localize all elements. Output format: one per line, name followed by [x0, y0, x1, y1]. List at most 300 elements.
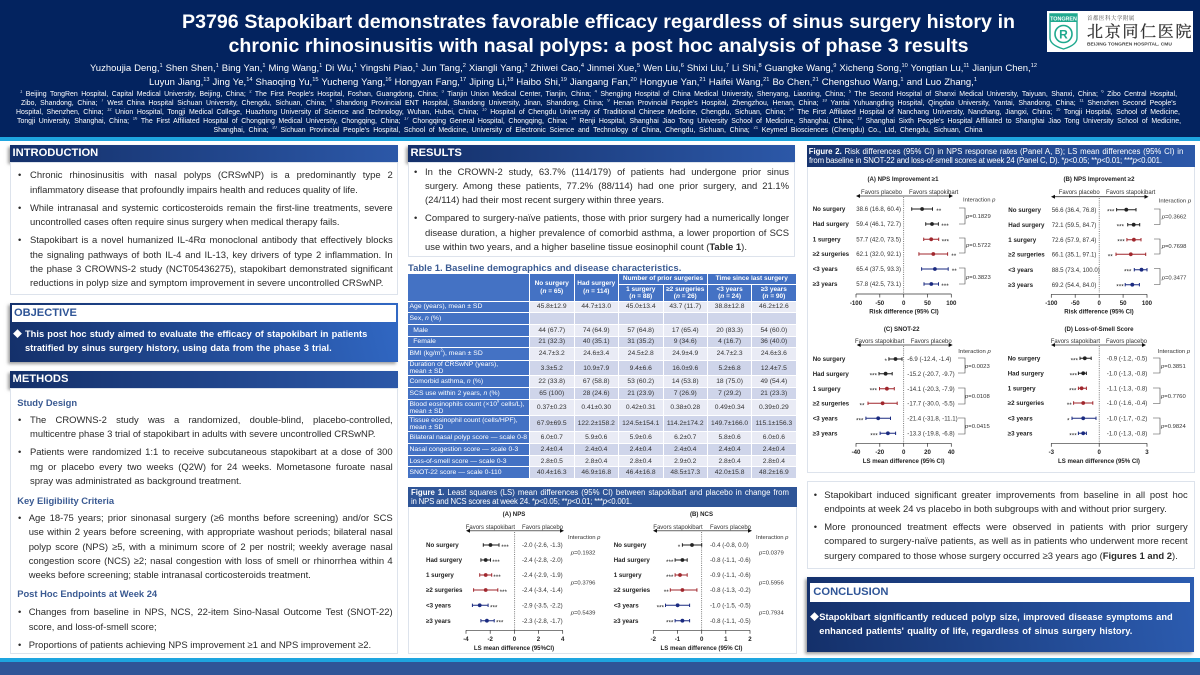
table 1: baseline characteristics: SCS use within 2 years, n (%) [410, 390, 500, 397]
forest plot A: NPS improvement ≥1: 1 surgery [813, 236, 841, 244]
table 1: baseline characteristics: 5.9±0.6 [630, 434, 652, 441]
forest plot B: NPS improvement ≥2: <3 years [1008, 267, 1034, 274]
table 1: baseline characteristics: 46.2±12.6 [759, 303, 789, 310]
forest plot A: NPS: *** [493, 574, 501, 581]
table 1: baseline characteristics: 2.4±0.4 [630, 446, 652, 453]
forest plot A: NPS: p=0.3796 [570, 581, 596, 587]
forest plot B: NCS: Had surgery [614, 557, 650, 564]
forest plot B: NPS improvement ≥2: -50 [1071, 300, 1080, 307]
forest plot B: NCS: <3 years [614, 602, 639, 610]
table 1: baseline characteristics: 5.9±0.6 [585, 434, 607, 441]
table 1: baseline characteristics: 2.8±0.4 [763, 458, 785, 465]
affiliations [16, 90, 1181, 134]
table 1: baseline characteristics: Tissue eosinophil count (cells/HPF), [410, 417, 518, 424]
table 1: baseline characteristics: 9 (34.6) [674, 338, 697, 345]
table 1: baseline characteristics: 38.8±12.8 [715, 303, 744, 310]
table 1: baseline characteristics: 2.8±0.4 [718, 458, 741, 465]
forest plot B: NPS improvement ≥2: p=0.7698 [1161, 244, 1187, 250]
section heading: methods: METHODS [12, 373, 68, 385]
panel: results summary text: • [814, 490, 817, 501]
table 1 heading: Table 1. Baseline demographics and disease characteristics. [408, 262, 681, 274]
forest plot C: SNOT-22: -40 [852, 449, 861, 456]
forest plot A: NPS improvement ≥1: *** [941, 223, 949, 230]
panel: methods text: spray was administrated as background treatment. [30, 476, 241, 487]
forest plot C: SNOT-22: p=0.0415 [964, 424, 990, 430]
forest plot B: NPS improvement ≥2: Favors placebo [1059, 190, 1100, 196]
forest plot A: NPS: Interaction p [568, 535, 601, 541]
forest plot B: NPS improvement ≥2: *** [1124, 269, 1132, 276]
forest plot C: SNOT-22: LS mean difference (95% CI) [863, 458, 945, 465]
heading: key eligibility criteria: Key Eligibility Criteria [17, 495, 114, 506]
panel: results text: surgery. Among these patients, 77.2% (88/114) had one prior surgery, and 21.1% [425, 181, 789, 192]
table 1: baseline characteristics: Loss-of-smell score — scale 0-3 [410, 458, 507, 465]
panel: methods text: congestion score (NCS) ≥2; nasal congestion with loss of smell or rhinorrhea within 4 [29, 556, 393, 567]
heading: study design: Study Design [17, 397, 77, 408]
table 1: baseline characteristics: (n = 114) [583, 288, 609, 294]
table 1: baseline characteristics: 16.0±9.6 [672, 365, 698, 372]
forest plot D: loss-of-smell score: 1 surgery [1008, 386, 1036, 392]
conclusion heading: CONCLUSION [813, 586, 889, 598]
table 1: baseline characteristics: 45.0±13.4 [626, 303, 656, 310]
panel: conclusion [807, 577, 1194, 652]
forest plot D: loss-of-smell score: -1.0 (-1.3, -0.8) [1107, 430, 1147, 438]
panel: results text [408, 162, 795, 257]
table 1: baseline characteristics: 14 (53.8) [672, 378, 699, 385]
forest plot C: SNOT-22: ** [860, 402, 865, 409]
forest plot B: NCS: -0.8 (-1.3, -0.2) [710, 587, 751, 594]
forest plot A: NPS: LS mean difference (95%CI) [474, 645, 554, 652]
section heading: results: RESULTS [410, 147, 462, 159]
forest plot B: NPS improvement ≥2: p=0.3662 [1161, 215, 1186, 221]
forest plot A: NPS improvement ≥1: -50 [875, 300, 885, 307]
table 1: baseline characteristics: 74 (64.9) [583, 327, 610, 334]
panel: results text: (24/114) had their most recent surgery within three years. [425, 195, 664, 206]
table 1: baseline characteristics: 7 (29.2) [718, 390, 741, 397]
panel: methods text: Age 18-75 years; prior sinonasal surgery (≥6 months before screening) and/or SCS [29, 513, 393, 524]
panel: introduction text: Chronic rhinosinusitis with nasal polyps (CRSwNP) is a predominantly type 2 [30, 170, 393, 181]
table 1: baseline characteristics: 2.8±0.4 [630, 458, 652, 465]
forest plot D: loss-of-smell score: ≥2 surgeries [1008, 400, 1045, 407]
forest plot A: NPS: *** [500, 589, 508, 596]
forest plot B: NCS: *** [666, 620, 674, 627]
forest plot B: NCS: p=0.5956 [758, 581, 784, 587]
panel: introduction text: While intranasal and systemic corticosteroids remain the first-line treatments, severe [30, 203, 393, 214]
table 1: baseline characteristics: 0.41±0.30 [581, 404, 611, 411]
figure 2 caption: from baseline in SNOT-22 and loss-of-smell scores at week 24 (Panel C, D). *p<0.05; **p<0.01; ***p<0.001. [809, 156, 1162, 165]
table 1: baseline characteristics: 48.2±16.9 [759, 469, 789, 476]
table 1: baseline characteristics: 57 (64.8) [627, 327, 654, 334]
panel: introduction text: • [18, 170, 21, 181]
table 1: baseline characteristics: 42.0±15.8 [715, 469, 744, 476]
forest plot B: NCS: Interaction p [756, 535, 789, 541]
logo: Beijing Tongren Hospital: BEIJING TONGREN HOSPITAL. CMU [1087, 42, 1172, 48]
logo: Beijing Tongren Hospital: 首都医科大学附属 [1087, 14, 1135, 22]
forest plot B: NPS improvement ≥2: *** [1117, 239, 1125, 246]
forest plot A: NPS improvement ≥1: 57.7 (42.0, 73.5) [856, 236, 901, 244]
forest plot B: NCS: ≥2 surgeries [614, 587, 651, 594]
forest plot C: SNOT-22: 40 [948, 449, 955, 456]
table 1: baseline characteristics: 31 (35.2) [627, 338, 654, 345]
forest plot A: NPS improvement ≥1: 65.4 (37.5, 93.3) [856, 266, 901, 273]
forest plot C: SNOT-22: Favors placebo [911, 339, 952, 345]
forest plot D: loss-of-smell score: p=0.9824 [1160, 424, 1186, 430]
forest plot D: loss-of-smell score: -1.0 (-1.3, -0.8) [1107, 370, 1147, 378]
panel: methods text: • [18, 415, 21, 426]
table 1: baseline characteristics: 24.6±3.4 [583, 350, 609, 357]
forest plot D: loss-of-smell score: No surgery [1008, 356, 1041, 362]
panel: introduction text: • [18, 203, 21, 214]
table 1: baseline characteristics: Duration of CRSwNP (years), [410, 361, 498, 368]
table 1: baseline characteristics: <3 years [716, 286, 743, 293]
objective heading [12, 305, 396, 322]
table 1: baseline characteristics: 54 (60.0) [760, 327, 787, 334]
forest plot A: NPS improvement ≥1: p=0.5722 [965, 243, 991, 249]
forest plot A: NPS improvement ≥1: 59.4 (46.1, 72.7) [856, 221, 901, 228]
forest plot C: SNOT-22: -13.3 (-19.8, -6.8) [907, 430, 955, 438]
forest plot C: SNOT-22: No surgery [813, 356, 846, 363]
forest plot B: NCS: *** [666, 559, 674, 566]
authors: Luyun Jiang,13 Jing Ye,14 Shaoqing Yu,15 Yucheng Yang,16 Hongyan Fang,17 Jiping Li,18 Haibo Shi,19 Jiangang Fan,20 Hongyue Yan,21 Haifei Wang,21 Bo Chen,21 Chengshuo Wang,1 and Luo Zhang,1 [149, 76, 977, 88]
forest plot C: SNOT-22: 0 [902, 449, 906, 456]
forest plot A: NPS: p=0.5439 [570, 611, 595, 617]
table 1: baseline characteristics: Female [413, 338, 436, 345]
forest plot A: NPS improvement ≥1: *** [942, 238, 950, 245]
table 1: baseline characteristics: 45.8±12.9 [537, 303, 567, 310]
table 1: baseline characteristics: 149.7±166.0 [711, 420, 748, 427]
table 1: baseline characteristics: 24.7±3.2 [539, 350, 565, 357]
forest plot D: loss-of-smell score: Favors placebo [1106, 339, 1148, 345]
forest plot A: NPS: -2.0 (-2.6, -1.3) [522, 542, 563, 549]
forest plot B: NCS: *** [666, 574, 674, 581]
table 1: baseline characteristics: 2.4±0.4 [718, 446, 741, 453]
panel: introduction text [10, 162, 398, 295]
forest plot D: loss-of-smell score: Had surgery [1008, 370, 1044, 378]
forest plot B: NPS improvement ≥2: 66.1 (35.1, 97.1) [1052, 252, 1096, 258]
forest plot D: loss-of-smell score: <3 years [1008, 416, 1033, 422]
header banner [0, 0, 1200, 141]
forest plot A: NPS: 2 [537, 636, 541, 643]
forest plot B: NPS improvement ≥2: 50 [1120, 300, 1127, 307]
forest plot B: NCS: 2 [748, 636, 752, 643]
table 1: baseline characteristics: 5.2±6.8 [718, 365, 741, 372]
table 1: baseline characteristics: Number of prior surgeries [623, 275, 703, 282]
panel: results summary text: • [814, 522, 817, 533]
forest plot A: NPS: -2.4 (-2.9, -1.9) [522, 572, 563, 579]
forest plot B: NPS improvement ≥2: 88.5 (73.4, 100.0) [1052, 267, 1100, 274]
table 1: baseline characteristics: 48.5±17.3 [670, 469, 700, 476]
forest plot C: SNOT-22: p=0.0108 [964, 394, 990, 400]
forest plot B: NCS: Favors stapokibart [653, 525, 703, 531]
forest plot C: SNOT-22: -17.7 (-30.0, -5.5) [907, 400, 955, 408]
forest plot B: NPS improvement ≥2: ** [1108, 253, 1113, 260]
conclusion statement: enhanced patients' quality of life, regardless of sinus surgery history. [819, 626, 1132, 636]
forest plot A: NPS: (A) NPS [503, 511, 525, 518]
forest plot B: NPS improvement ≥2: 72.6 (57.9, 87.4) [1052, 237, 1096, 244]
forest plot B: NCS: p=0.7934 [758, 611, 784, 617]
forest plot B: NPS improvement ≥2: *** [1116, 284, 1124, 291]
objective statement: ◆ [13, 329, 22, 339]
forest plot B: NCS: p=0.0379 [758, 551, 784, 557]
forest plot A: NPS improvement ≥1: *** [941, 283, 949, 290]
forest plot D: loss-of-smell score: 3 [1145, 449, 1149, 456]
table 1: baseline characteristics: 28 (24.6) [583, 390, 610, 397]
forest plot B: NPS improvement ≥2: Favors stapokibart [1106, 190, 1156, 196]
forest plot B: NCS: Favors placebo [710, 525, 752, 531]
table 1: baseline characteristics: 17 (65.4) [672, 327, 699, 334]
forest plot A: NPS: Favors placebo [522, 525, 564, 531]
forest plot B: NPS improvement ≥2: No surgery [1008, 207, 1042, 214]
forest plot C: SNOT-22: *** [870, 388, 878, 395]
panel: methods text: multicentre phase 3 trial of stapokibart in adults with severe uncontrolled CRSwNP. [30, 429, 376, 440]
table 1: baseline characteristics: Had surgery [577, 280, 615, 287]
table 1: baseline characteristics: 67.9±69.5 [537, 420, 567, 427]
forest plot A: NPS: -2.9 (-3.5, -2.2) [522, 602, 563, 610]
table 1: baseline characteristics: 6.0±0.6 [763, 434, 785, 441]
forest plot B: NPS improvement ≥2 [1008, 176, 1192, 316]
forest plot D: loss-of-smell score: (D) Loss-of-Smell Score [1064, 326, 1134, 333]
forest plot B: NPS improvement ≥2: 69.2 (54.4, 84.0) [1052, 282, 1096, 289]
table 1: baseline characteristics: 22 (33.8) [538, 378, 565, 385]
forest plot B: NPS improvement ≥2: *** [1107, 209, 1115, 216]
table 1: baseline characteristics: 44.7±13.0 [581, 303, 611, 310]
logo: Beijing Tongren Hospital: R [1059, 28, 1068, 42]
forest plot A: NPS: *** [492, 559, 500, 566]
forest plot B: NCS: * [678, 544, 681, 551]
table 1: baseline characteristics: 49 (54.4) [760, 378, 787, 385]
forest plot C: SNOT-22: -20 [875, 449, 885, 456]
forest plot A: NPS: -2.4 (-3.4, -1.4) [522, 587, 563, 594]
panel: introduction text: inflammatory disease that profoundly impairs health and reduces quality of life. [30, 184, 358, 196]
table 1: baseline characteristics: 6.0±0.7 [541, 434, 563, 441]
heading: post hoc endpoints: Post Hoc Endpoints at Week 24 [17, 588, 157, 599]
table 1: baseline characteristics: 0.49±0.34 [715, 404, 744, 411]
section heading: introduction [10, 145, 398, 162]
forest plot A: NPS improvement ≥1: ≥3 years [813, 281, 838, 288]
forest plot A: NPS: ≥2 surgeries [426, 587, 463, 594]
forest plot A: NPS improvement ≥1: <3 years [813, 266, 838, 273]
forest plot A: NPS: <3 years [426, 602, 452, 610]
table 1: baseline characteristics: 3.3±5.2 [541, 365, 563, 372]
forest plot C: SNOT-22: p=0.0023 [964, 364, 990, 370]
panel: introduction text: uncontrolled cases often require sinus surgery when medical therapy fails. [30, 217, 340, 228]
forest plot C: SNOT-22: -14.1 (-20.3, -7.9) [907, 386, 955, 393]
panel: results text: disease duration, a higher prevalence of comorbid asthma, a lower proportion of SCS [425, 228, 789, 239]
forest plot C: SNOT-22: * [884, 358, 887, 365]
forest plot C: SNOT-22: -15.2 (-20.7, -9.7) [907, 371, 955, 378]
panel: results summary text: Stapokibart induced significant greater improvements from baseline in all post hoc [824, 490, 1188, 501]
logo: Beijing Tongren Hospital [1047, 11, 1193, 52]
objective statement: stratified by sinus surgery history, using data from the phase 3 trial. [25, 343, 332, 353]
table 1: baseline characteristics: 2.9±0.2 [674, 458, 696, 465]
forest plot A: NPS: 0 [513, 636, 517, 643]
forest plot B: NCS: -2 [651, 636, 657, 643]
section heading: methods [10, 371, 398, 388]
forest plot B: NCS: 1 [724, 636, 728, 643]
forest plot A: NPS: p=0.1932 [570, 551, 595, 557]
forest plot B: NCS: ≥3 years [614, 618, 639, 625]
forest plot B: NPS improvement ≥2: p=0.3477 [1161, 276, 1186, 282]
table 1: baseline characteristics: 21 (23.3) [760, 390, 787, 397]
table 1: baseline characteristics: 2.8±0.4 [585, 458, 607, 465]
table 1: baseline characteristics: Bilateral nasal polyp score — scale 0-8 [410, 434, 527, 441]
panel: methods text: score, and loss-of-smell score; [29, 622, 157, 633]
forest plot A: NPS improvement ≥1: Favors stapokibart [909, 190, 959, 196]
forest plot D: loss-of-smell score: -1.0 (-1.7, -0.2) [1107, 416, 1147, 422]
conclusion statement [810, 612, 1173, 636]
forest plot B: NCS: -0.4 (-0.8, 0.0) [710, 542, 749, 549]
table 1: baseline characteristics: 2.8±0.5 [541, 458, 563, 465]
table 1: baseline characteristics: 4 (16.7) [718, 338, 741, 345]
forest plot A: NPS improvement ≥1 [813, 176, 996, 316]
table 1: baseline characteristics: 40 (35.1) [583, 338, 610, 345]
table 1: baseline characteristics: 24.5±2.8 [628, 350, 654, 357]
table 1: baseline characteristics: mean ± SD [410, 368, 443, 375]
table 1: baseline characteristics: 65 (100) [539, 390, 564, 397]
forest plot A: NPS improvement ≥1: Had surgery [813, 221, 849, 228]
panel: methods text: mg or placebo every two weeks (Q2W) for 24 weeks. Mometasone furoate nasal [30, 462, 393, 473]
forest plot B: NPS improvement ≥2: 1 surgery [1008, 237, 1037, 244]
forest plot B: NCS: 1 surgery [614, 572, 642, 579]
table 1: baseline characteristics [408, 274, 796, 478]
panel: introduction text: Stapokibart is a novel humanized IL-4Rα monoclonal antibody that effectively blocks [30, 235, 393, 246]
table 1: baseline characteristics: 2.4±0.4 [585, 446, 607, 453]
table 1: baseline characteristics: Sex, n (%) [410, 315, 441, 322]
table 1: baseline characteristics: 10.9±7.9 [583, 365, 609, 372]
forest plot D: loss-of-smell score: p=0.7760 [1160, 394, 1186, 400]
forest plot B: NCS: -0.8 (-1.1, -0.5) [710, 618, 751, 625]
section heading: introduction: INTRODUCTION [12, 147, 98, 159]
forest plot C: SNOT-22: *** [870, 432, 878, 439]
table 1: baseline characteristics: BMI (kg/m2), mean ± SD [410, 348, 483, 357]
forest plot D: loss-of-smell score: *** [1070, 372, 1078, 379]
table 1: baseline characteristics: 7 (26.9) [674, 390, 697, 397]
forest plot A: NPS: Had surgery [426, 557, 463, 564]
forest plot C: SNOT-22: Interaction p [958, 349, 991, 355]
panel: introduction text: • [18, 235, 21, 246]
forest plot B: NPS improvement ≥2: ≥3 years [1008, 282, 1034, 289]
forest plot A: NPS: 1 surgery [426, 572, 454, 579]
forest plot A: NPS: ≥3 years [426, 618, 451, 625]
table 1: baseline characteristics: (n = 90) [762, 293, 785, 300]
forest plot A: NPS improvement ≥1: 57.8 (42.5, 73.1) [856, 281, 901, 288]
table 1: baseline characteristics: 53 (60.2) [627, 378, 654, 385]
forest plot D: loss-of-smell score: * [1067, 417, 1070, 424]
forest plot C: SNOT-22: -6.9 (-12.4, -1.4) [907, 356, 951, 363]
forest plot B: NCS: -1.0 (-1.5, -0.5) [710, 602, 751, 610]
objective statement: This post hoc study aimed to evaluate the efficacy of stapokibart in patients [25, 329, 367, 339]
table 1: baseline characteristics: ≥2 surgeries [666, 286, 704, 293]
forest plot C: SNOT-22: -21.4 (-31.8, -11.1) [907, 416, 958, 422]
forest plot A: NPS improvement ≥1: ** [936, 208, 942, 215]
table 1: baseline characteristics: 9.4±6.6 [630, 365, 652, 372]
forest plot D: loss-of-smell score: ** [1067, 402, 1072, 409]
table 1: baseline characteristics: 67 (58.8) [583, 378, 610, 385]
panel: methods text: use within 2 years before screening, with appropriate washout periods; bilateral nasal [29, 527, 393, 538]
forest plot D: loss-of-smell score: *** [1069, 432, 1077, 439]
panel: methods text: Proportions of patients achieving NPS improvement ≥1 and NPS improvement ≥2. [29, 640, 371, 651]
forest plot C: SNOT-22: ≥2 surgeries [813, 400, 850, 408]
forest plot A: NPS: *** [501, 544, 509, 551]
forest plot A: NPS: *** [496, 620, 504, 627]
forest plot B: NPS improvement ≥2: -100 [1045, 300, 1058, 307]
forest plot A: NPS: No surgery [426, 542, 459, 549]
forest plot B: NCS: -0.8 (-1.1, -0.6) [710, 557, 751, 564]
panel: introduction text: the signaling pathways of both IL-4 and IL-13, key drivers of type 2 inflammation. In [30, 250, 393, 261]
table 1: baseline characteristics: 1 surgery [626, 286, 655, 293]
forest plot D: loss-of-smell score: Favors stapokibart [1051, 339, 1100, 345]
panel: methods text: • [18, 640, 21, 651]
forest plot B: NCS: (B) NCS [690, 511, 713, 518]
forest plot A: NPS improvement ≥1: p=0.1829 [965, 214, 991, 220]
forest plot D: loss-of-smell score: -0.9 (-1.2, -0.5) [1107, 356, 1147, 362]
table 1: baseline characteristics: 122.2±158.2 [578, 420, 615, 427]
panel: figure 2 [807, 145, 1195, 473]
forest plot D: loss-of-smell score: Interaction p [1158, 349, 1191, 355]
forest plot C: SNOT-22: Favors stapokibart [855, 339, 905, 345]
table 1: baseline characteristics: 114.2±174.2 [667, 420, 704, 427]
figure 1 caption [408, 487, 797, 507]
forest plot C: SNOT-22: <3 years [813, 416, 838, 422]
table 1: baseline characteristics: Age (years), mean ± SD [410, 303, 482, 310]
panel: results summary text: compared to surgery-naïve patients, as well as in patients who underwent more recent [824, 536, 1188, 547]
forest plot B: NPS improvement ≥2: 0 [1098, 300, 1102, 307]
forest plot A: NPS improvement ≥1: Interaction p [963, 197, 996, 203]
table 1: baseline characteristics: Comorbid asthma, n (%) [410, 378, 483, 385]
panel: introduction text: reductions in polyp size and symptom improvement in severe uncontrolled CRSwNP. [30, 278, 383, 289]
panel: methods text: The CROWNS-2 study was a randomized, double-blind, placebo-controlled, [30, 415, 393, 426]
forest plot B: NCS: 0 [700, 636, 704, 643]
table 1: baseline characteristics: 0.38±0.28 [670, 404, 700, 411]
table 1: baseline characteristics: 12.4±7.5 [761, 365, 787, 372]
conclusion heading [810, 583, 1190, 602]
table 1: baseline characteristics: 124.5±154.1 [622, 420, 659, 427]
table 1: baseline characteristics: Male [413, 327, 428, 334]
panel: results summary text [807, 481, 1195, 569]
forest plot A: NPS improvement ≥1: 38.6 (16.8, 60.4) [856, 206, 901, 213]
logo: Beijing Tongren Hospital: 北京同仁医院 [1087, 19, 1193, 42]
table 1: baseline characteristics: 46.9±16.8 [581, 469, 611, 476]
forest plot B: NPS improvement ≥2: 72.1 (59.5, 84.7) [1052, 222, 1096, 229]
forest plot C: SNOT-22: *** [870, 373, 878, 380]
table 1: baseline characteristics: 43.7 (11.7) [669, 303, 701, 310]
panel: results summary text: surgery compared to those whose surgery occurred ≥3 years ago (Figures 1 and 2). [824, 551, 1178, 562]
forest plot D: loss-of-smell score: *** [1071, 357, 1079, 364]
table 1: baseline characteristics: mean ± SD [410, 424, 443, 431]
panel: introduction text: the phase 3 CROWNS-2 study (NCT05436275), stapokibart demonstrated significant [30, 264, 393, 275]
table 1: baseline characteristics: (n = 88) [629, 293, 652, 300]
forest plot C: SNOT-22: *** [856, 417, 864, 424]
panel: methods text: • [18, 513, 21, 524]
table 1: baseline characteristics: (n = 24) [718, 293, 741, 300]
conclusion statement: Stapokibart significantly reduced polyp size, improved disease symptoms and [819, 612, 1173, 622]
panel: methods text: • [18, 607, 21, 618]
title: P3796 Stapokibart demonstrates favorable efficacy regardless of sinus surgery history in [182, 11, 1015, 33]
authors [90, 62, 1037, 88]
table 1: baseline characteristics: SNOT-22 score — scale 0-110 [410, 469, 502, 476]
forest plot C: SNOT-22: 1 surgery [813, 386, 841, 393]
table 1: baseline characteristics: 24.6±3.6 [761, 350, 787, 357]
forest plot B: NCS: ** [664, 589, 669, 596]
footer band [0, 658, 1200, 675]
forest plot B: NCS: No surgery [614, 542, 647, 549]
forest plot A: NPS improvement ≥1: No surgery [813, 206, 846, 213]
table 1: baseline characteristics: 21 (32.3) [538, 338, 565, 345]
forest plot B: NPS improvement ≥2: (B) NPS Improvement ≥2 [1063, 176, 1135, 183]
figure 2 caption [807, 145, 1195, 167]
forest plot D: loss-of-smell score: -1.1 (-1.3, -0.8) [1107, 386, 1147, 392]
forest plot A: NPS improvement ≥1: 62.1 (32.0, 92.1) [856, 251, 901, 258]
forest plot B: NPS improvement ≥2: Had surgery [1008, 222, 1045, 229]
